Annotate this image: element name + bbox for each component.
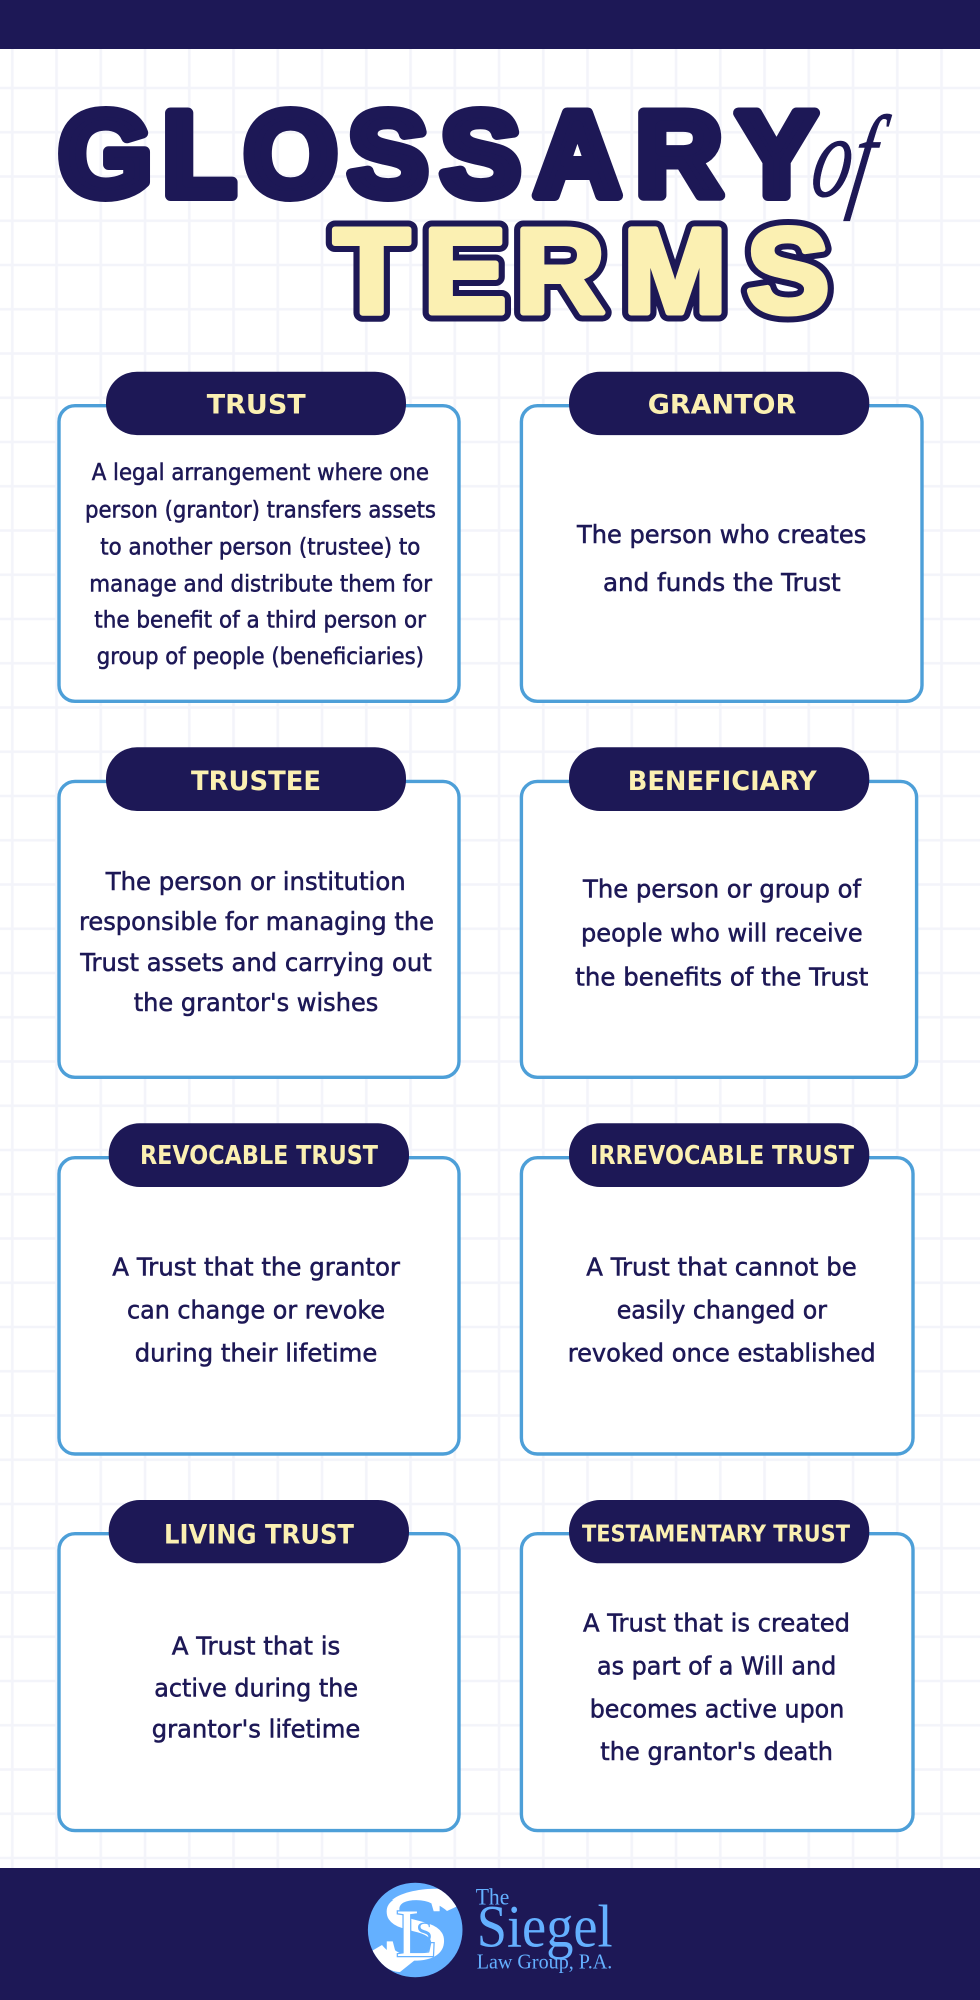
definition: the benefit of a third person or [94, 607, 427, 633]
card frame [521, 1158, 913, 1454]
definition: A Trust that is [172, 1631, 340, 1660]
card frame [59, 406, 459, 701]
definition: The person who creates [576, 520, 866, 549]
icon: SLS monogram: S [379, 1873, 451, 1980]
term heading: REVOCABLE TRUST [140, 1141, 378, 1171]
heading pill [569, 372, 869, 435]
term heading: IRREVOCABLE TRUST [590, 1141, 854, 1171]
definition [112, 1253, 401, 1368]
card frame [521, 1534, 913, 1831]
heading pill [569, 747, 869, 811]
definition: revoked once established [568, 1339, 876, 1368]
wordmark: Law Group, P.A. [477, 1950, 612, 1974]
term heading: BENEFICIARY [628, 766, 817, 797]
title word: TERMS: TERMS [334, 204, 830, 339]
term heading: GRANTOR [648, 389, 797, 420]
title word: TERMS: TERMS [334, 204, 830, 339]
definition: the grantor's wishes [134, 988, 378, 1017]
card frame [59, 1158, 459, 1454]
card frame [521, 406, 922, 701]
definition: The person or institution [105, 867, 406, 896]
icon: SLS monogram: S [416, 1916, 433, 1949]
definition [576, 520, 866, 597]
heading pill [106, 747, 406, 811]
panel: Testamentary Trust [521, 1500, 913, 1831]
heading pill [106, 372, 406, 435]
definition: The person or group of [582, 875, 862, 904]
definition: during their lifetime [135, 1339, 377, 1368]
definition [79, 867, 434, 1017]
definition [575, 875, 868, 992]
definition: A Trust that the grantor [112, 1253, 401, 1282]
definition: becomes active upon [590, 1694, 844, 1723]
term heading: LIVING TRUST [164, 1519, 355, 1550]
panel: Trustee [59, 747, 459, 1077]
title word: GLOSSARY: GLOSSARY [59, 88, 817, 222]
definition [568, 1253, 876, 1368]
definition: people who will receive [581, 919, 863, 948]
definition: as part of a Will and [597, 1652, 836, 1681]
footer band [0, 1868, 980, 2000]
top band [0, 0, 980, 49]
definition: responsible for managing the [79, 907, 434, 936]
definition: the benefits of the Trust [575, 963, 868, 992]
heading pill [109, 1123, 409, 1187]
definition: A Trust that is created [583, 1609, 850, 1638]
card frame [59, 1534, 459, 1831]
footer logo [368, 1882, 612, 1978]
heading pill [109, 1500, 409, 1563]
definition: to another person (trustee) to [100, 534, 420, 560]
definition: A legal arrangement where one [92, 460, 429, 486]
title [59, 88, 896, 339]
definition: and funds the Trust [603, 568, 841, 597]
definition: manage and distribute them for [89, 571, 433, 597]
heading pill [569, 1123, 869, 1187]
heading pill [569, 1500, 869, 1563]
icon: SLS monogram [368, 1882, 462, 1978]
panel: Beneficiary [521, 747, 917, 1077]
panel: Irrevocable Trust [521, 1123, 913, 1454]
definition: A Trust that cannot be [586, 1253, 857, 1282]
wordmark: The [476, 1884, 509, 1909]
definition [152, 1631, 360, 1744]
definition: Trust assets and carrying out [79, 948, 432, 977]
title word: of: of [803, 93, 896, 222]
panel: Living Trust [59, 1500, 459, 1831]
definition [583, 1609, 850, 1766]
definition: easily changed or [617, 1296, 828, 1325]
definition: active during the [154, 1674, 358, 1703]
definition: person (grantor) transfers assets [85, 497, 436, 523]
term heading: TRUSTEE [191, 766, 321, 797]
card frame [59, 781, 459, 1077]
panel: Grantor [521, 372, 922, 701]
panel: Trust [59, 372, 459, 701]
term heading: TRUST [207, 389, 306, 420]
panel: Revocable Trust [59, 1123, 459, 1454]
definition: the grantor's death [600, 1737, 833, 1766]
icon: SLS monogram: L [396, 1895, 438, 1971]
term heading: TESTAMENTARY TRUST [582, 1522, 850, 1548]
wordmark [476, 1884, 613, 1974]
card frame [521, 781, 917, 1077]
wordmark: Siegel [477, 1894, 613, 1960]
definition: can change or revoke [127, 1296, 385, 1325]
definition [85, 460, 436, 670]
definition: group of people (beneficiaries) [97, 644, 424, 670]
definition: grantor's lifetime [152, 1715, 360, 1744]
